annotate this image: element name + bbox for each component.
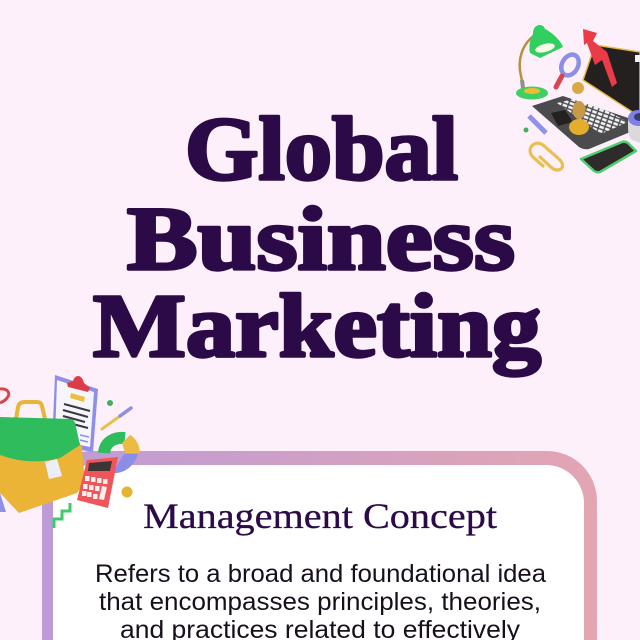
icon: office illustration top right [516,25,640,172]
icon: green dot [107,400,113,406]
icon: yellow dot [122,486,132,498]
card body text [95,560,546,640]
icon: clipboard [52,375,98,452]
icon: paperclip [530,143,563,170]
icon: desk lamp [516,25,563,100]
card interior [53,465,584,640]
title: Global [185,100,458,199]
icon: business illustration left [0,375,140,528]
card frame [42,451,597,640]
title: Marketing [93,277,541,376]
icon: pencil [529,116,546,133]
card body text: Refers to a broad and foundational idea [95,560,546,588]
icon: pie chart [104,435,140,473]
icon: red growth arrow [583,29,617,87]
icon: mug [628,110,640,143]
icon: green dot [524,128,528,132]
icon: green zigzag [54,503,70,528]
icon: gold coins [569,82,589,135]
title [93,100,541,376]
icon: pen [102,408,131,429]
icon: calculator [77,457,118,508]
panel: management concept [42,451,597,640]
title: Business [127,190,515,289]
icon: briefcase [0,402,85,513]
icon: magnifying glass [556,52,582,87]
card body text: that encompasses principles, theories, [99,588,541,616]
icon: red ring [0,389,9,403]
card heading: Management Concept [143,496,497,536]
icon: smartphone [581,142,636,172]
icon: laptop [532,45,640,149]
